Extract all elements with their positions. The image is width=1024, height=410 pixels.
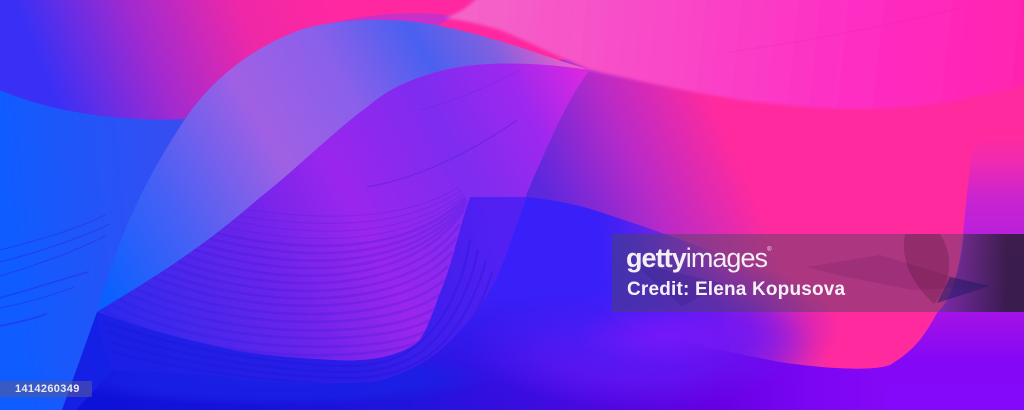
panel: left blue area	[0, 90, 260, 410]
thin crease lines on the upper leaf	[367, 70, 520, 187]
violet blend on lower part of the red wave	[659, 264, 833, 366]
image id tag: 1414260349	[15, 383, 80, 395]
panel: lower outer band of the leaf	[97, 197, 527, 383]
panel: central purple leaf	[97, 64, 590, 383]
soft blue shade under the leaf	[50, 350, 490, 406]
purple band above the ribbon	[290, 13, 455, 38]
violet blob under the lower edge of the wave	[470, 281, 810, 409]
credit panel shading	[633, 234, 1024, 312]
logo wordmark: gettyimages®	[626, 243, 772, 273]
image id tag	[0, 381, 92, 397]
panel: top-left magenta area	[0, 0, 640, 121]
panel: red wave	[470, 55, 1024, 369]
credit panel	[612, 234, 1024, 312]
upper contour lines fading out	[224, 186, 464, 239]
panel: light translucent ribbon	[97, 20, 590, 312]
panel: top-right pink wave	[445, 0, 1024, 109]
left wave lines	[0, 215, 110, 326]
panel: lower-left dark blue corner	[62, 312, 113, 410]
top-right hairline	[730, 8, 960, 52]
photographer credit: Credit: Elena Kopusova	[627, 279, 845, 300]
soft violet glow beneath credit	[575, 305, 755, 365]
panel: right edge violet strip	[885, 90, 1024, 410]
contour lines on the inner leaf	[203, 196, 467, 356]
contour lines on the outer band	[104, 240, 492, 384]
panel: blue fold	[428, 197, 718, 374]
